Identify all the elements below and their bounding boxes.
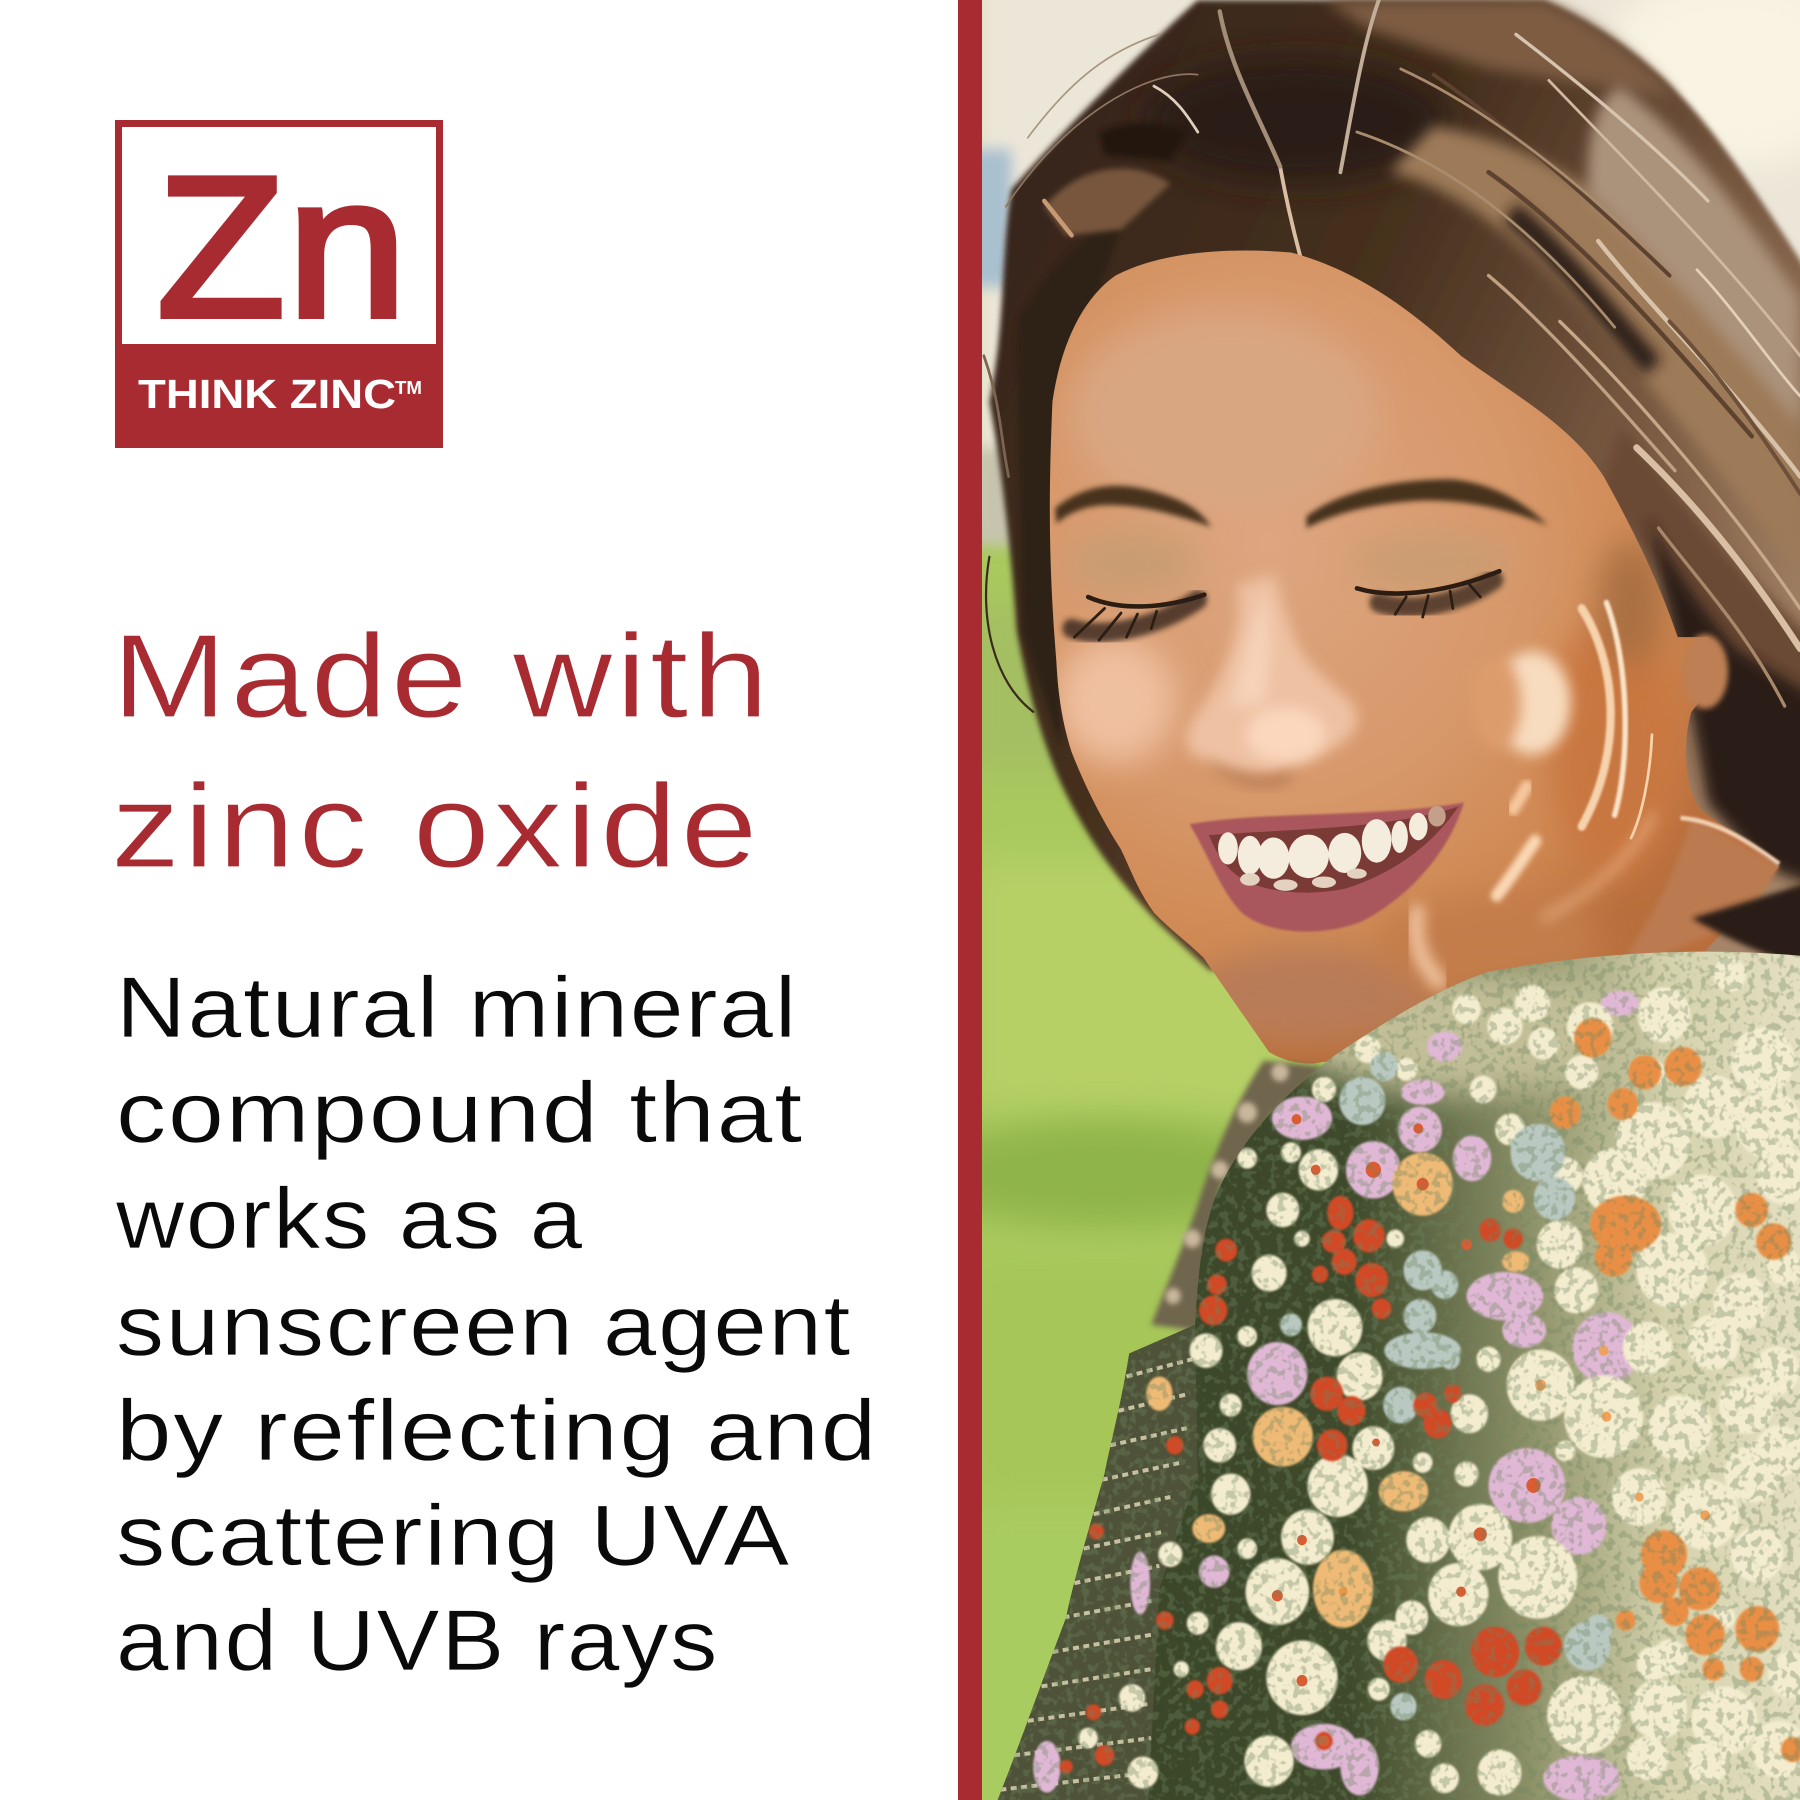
logo symbol: Zn: n <box>287 136 407 359</box>
blouse with floral print <box>982 900 1800 1800</box>
flowers: yellow and peach <box>1146 1153 1530 1628</box>
hair strands <box>984 0 1800 712</box>
face shading <box>1055 310 1680 1039</box>
lit shoulder area <box>1280 969 1642 1095</box>
logo footer band <box>115 344 443 448</box>
logo tagline: THINK ZINC <box>138 371 396 417</box>
body text <box>115 960 878 1689</box>
cheek sun highlights <box>1416 603 1653 982</box>
flowers: lilac <box>1033 991 1640 1800</box>
ear <box>1682 634 1728 709</box>
hair tuft at nape <box>1690 881 1800 956</box>
body text: and UVB rays <box>116 1593 719 1689</box>
neck <box>1628 822 1782 954</box>
red divider bar <box>958 0 982 1800</box>
flowers: pale blue <box>1280 1052 1612 1720</box>
nose <box>1187 574 1357 786</box>
body text: scattering UVA <box>116 1488 791 1584</box>
flowers: cream <box>1078 957 1800 1795</box>
flower centres <box>1272 1114 1710 1747</box>
body text: works as a <box>115 1171 584 1267</box>
heading <box>111 610 772 893</box>
heading: zinc oxide <box>111 760 761 893</box>
smocked sleeve band <box>998 1325 1198 1800</box>
flowers: red <box>1060 1196 1562 1774</box>
eye: left closed lashes <box>1072 595 1204 640</box>
logo symbol: Zn <box>157 136 407 359</box>
heading: Made with <box>112 610 772 743</box>
face <box>1050 250 1800 1064</box>
photo: smiling woman in floral blouse <box>924 0 1800 1800</box>
logo tagline: TM <box>395 378 422 398</box>
body text: compound that <box>116 1065 804 1161</box>
body text: Natural mineral <box>116 960 798 1056</box>
eyebrow: right <box>1306 479 1548 528</box>
eye: right closed lashes <box>1357 571 1499 617</box>
logo symbol: Zn: Z <box>157 136 285 359</box>
hair <box>989 0 1800 1033</box>
logo: Think Zinc badge <box>115 124 443 448</box>
rear arm of blouse <box>1151 1061 1324 1331</box>
fabric speckle <box>982 900 1800 1800</box>
body text: sunscreen agent <box>116 1278 852 1374</box>
eyebrow: left <box>1055 486 1212 527</box>
mouth: lips and teeth <box>1190 802 1464 932</box>
body text: by reflecting and <box>116 1383 878 1479</box>
photo background: sky and grass <box>924 0 1800 1800</box>
flowers: orange <box>1550 1018 1800 1762</box>
